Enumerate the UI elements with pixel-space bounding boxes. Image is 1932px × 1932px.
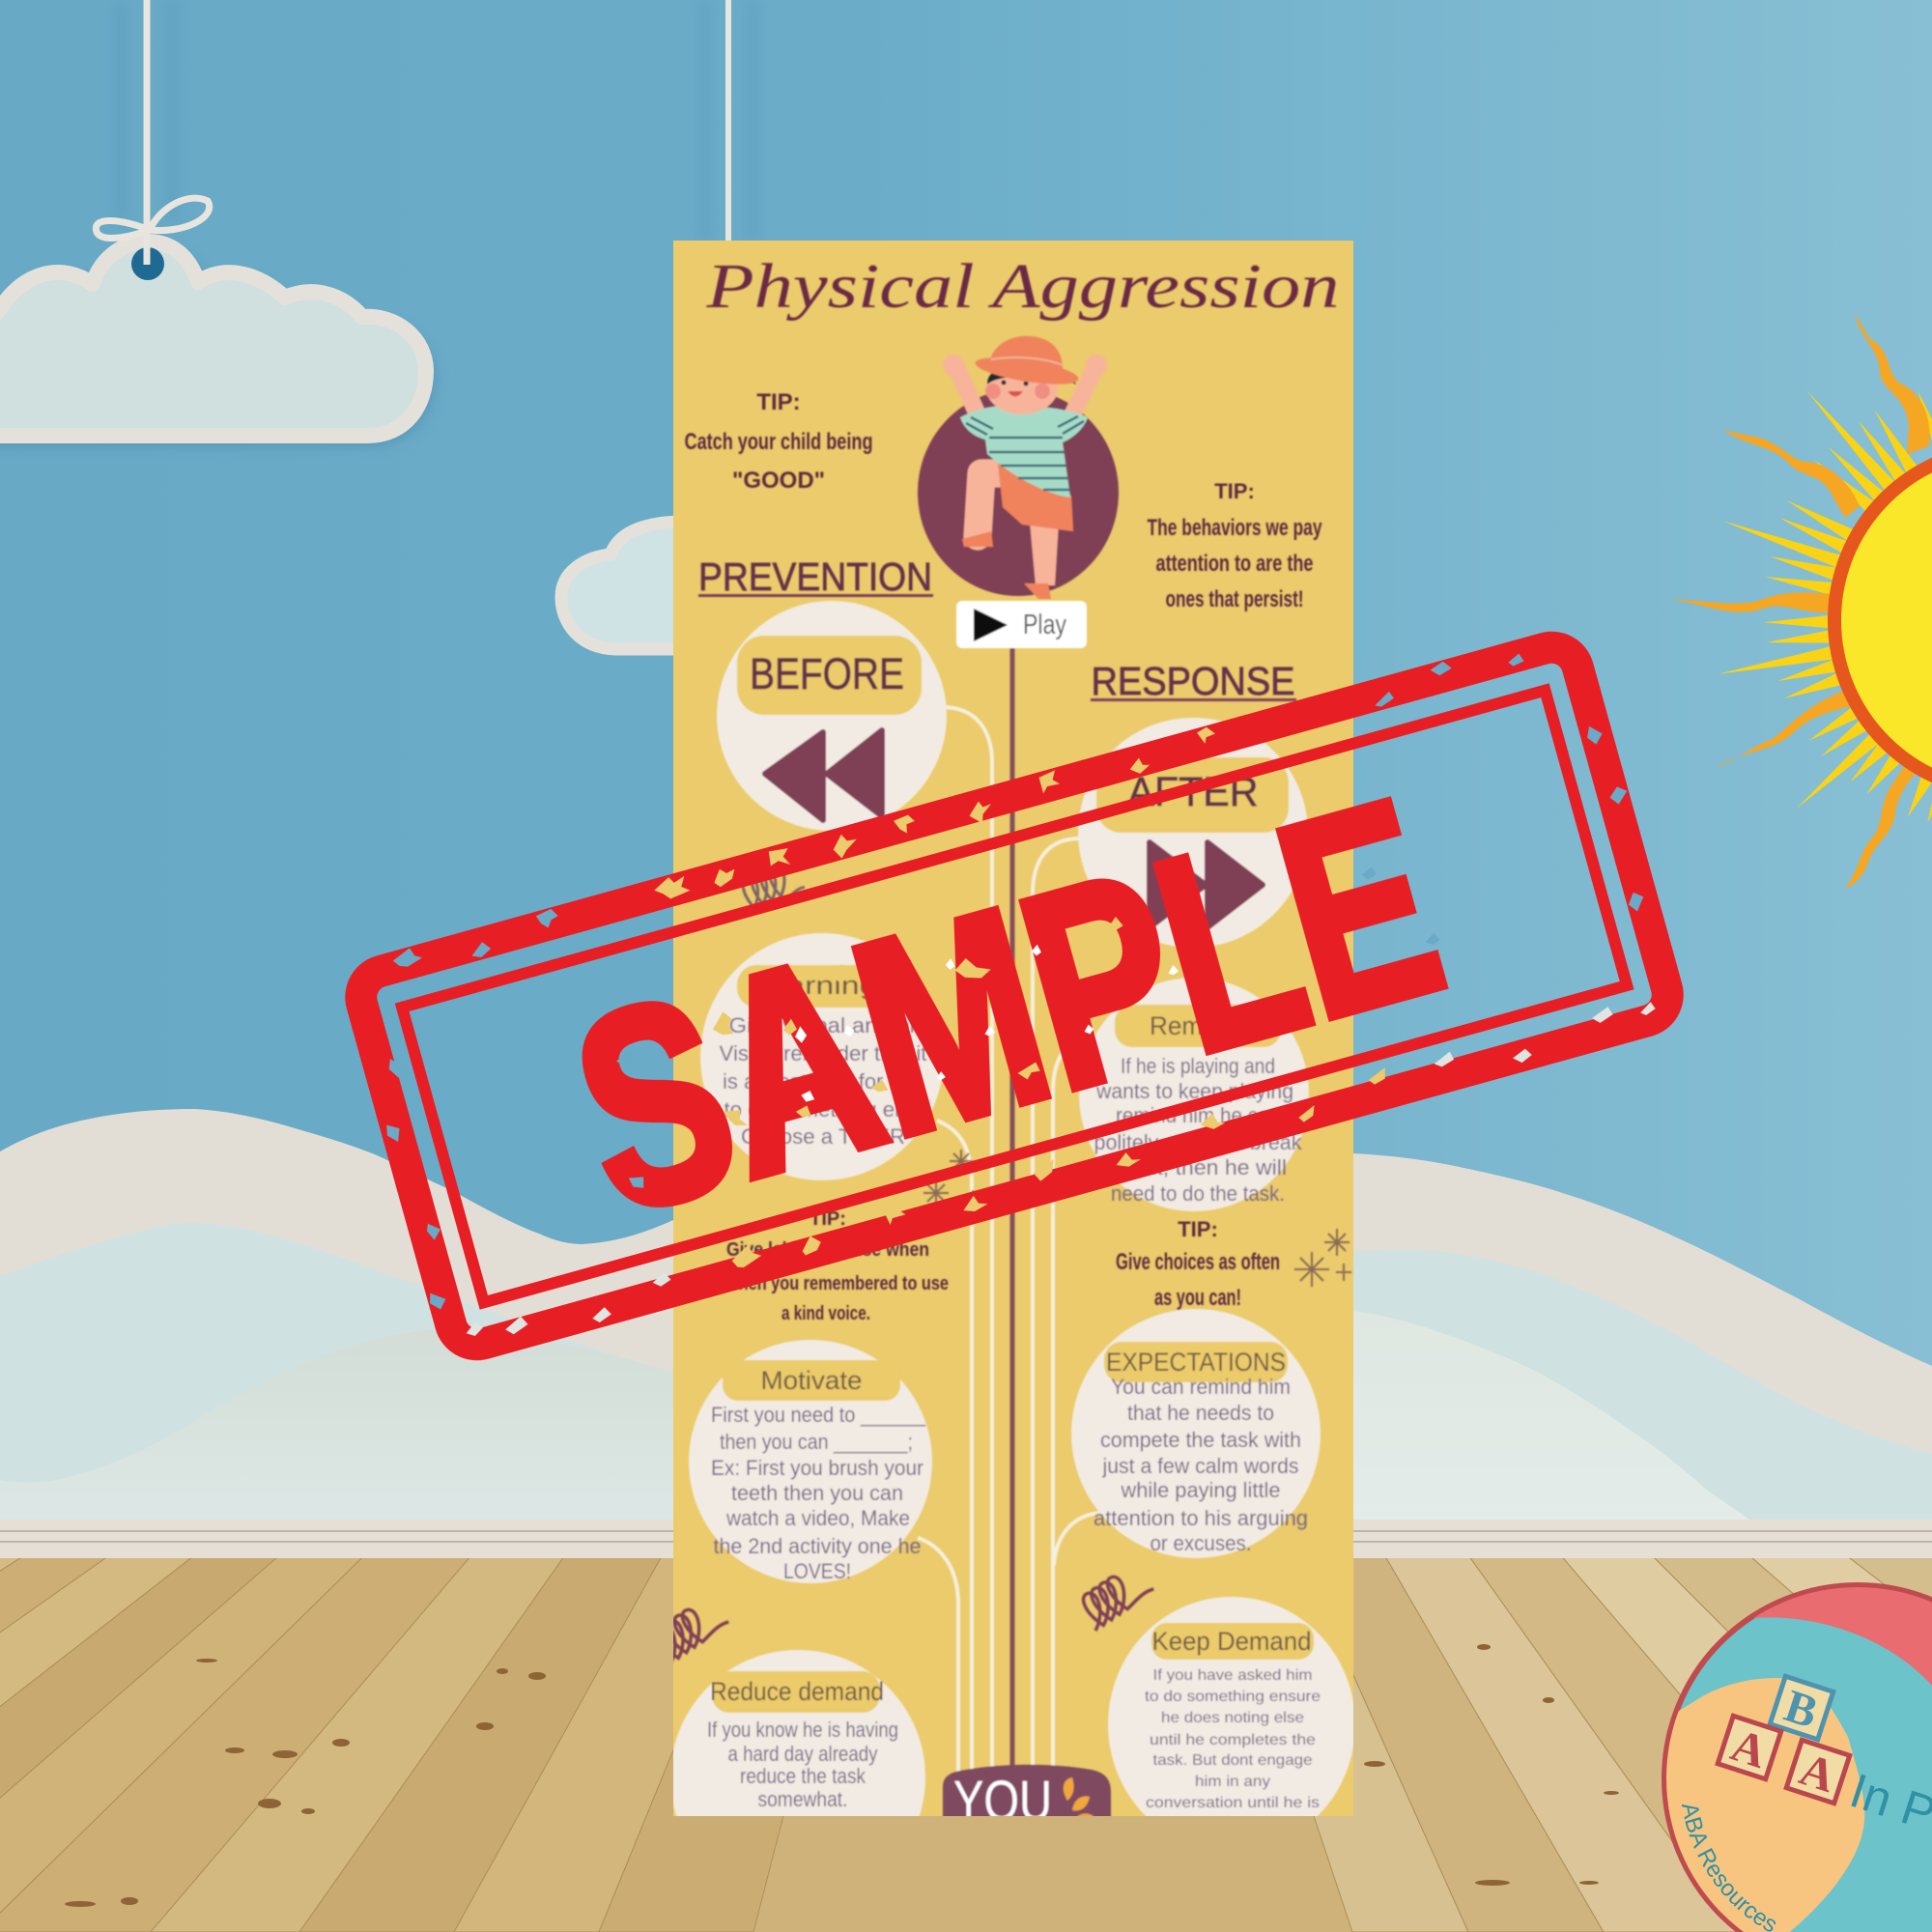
sun disc <box>1834 448 1932 792</box>
floor knots <box>65 1644 1619 1907</box>
floor planks <box>0 1558 1932 1932</box>
stamp outer border <box>355 641 1674 1350</box>
heading: prevention: PREVENTION <box>698 554 932 599</box>
logo badge: ABA in Play <box>1662 1582 1932 1932</box>
logo red crescent <box>1754 1587 1932 1686</box>
warning circle <box>700 933 944 1180</box>
stamp word: SAMPLE <box>547 741 1467 1273</box>
remind body text: If he is playing and <box>1121 1054 1275 1078</box>
tip: give praise: TIP: <box>810 1208 846 1230</box>
arms <box>957 369 1094 421</box>
tip: behaviors we pay attention to: TIP: <box>1214 479 1255 503</box>
play button <box>956 601 1087 648</box>
wood floor <box>0 1558 1932 1932</box>
illustration: child in purple circle <box>918 336 1119 599</box>
second hanging string <box>725 0 731 243</box>
keep demand body text: If you have asked him <box>1153 1667 1312 1684</box>
shirt stripes <box>966 416 1084 490</box>
motivate body text: then you can _______; <box>720 1430 913 1454</box>
tip: catch your child: Catch your child being <box>684 429 873 455</box>
remind label pill <box>1115 1005 1281 1047</box>
sparkles right <box>1294 1229 1351 1287</box>
after label pill <box>1096 757 1289 833</box>
tip: give choices: TIP: <box>1178 1217 1218 1241</box>
sun wavy rays <box>1671 314 1930 889</box>
expectations body text: attention to his arguing <box>1094 1506 1308 1530</box>
icon: string bow <box>96 198 210 238</box>
cloud: small cloud <box>561 522 686 649</box>
remind circle <box>1079 978 1309 1211</box>
before label pill <box>737 636 922 715</box>
icon: rewind <box>765 730 882 820</box>
raised leg <box>978 473 1005 536</box>
motivate body text: Ex: First you brush your <box>711 1456 923 1480</box>
title: Physical Aggression <box>705 251 1339 322</box>
sun straight rays <box>1717 386 1932 825</box>
reduce demand label pill <box>712 1671 880 1713</box>
block B: B <box>1778 1680 1824 1739</box>
sparkles left <box>923 1150 980 1206</box>
reduce demand body text <box>707 1718 898 1811</box>
motivate label pill <box>723 1360 900 1401</box>
motivate body text <box>711 1403 926 1583</box>
after circle: AFTER <box>1128 769 1258 815</box>
tip: behaviors we pay attention to: The behaviors we pay <box>1148 515 1322 541</box>
keep demand body text: until he completes the <box>1150 1732 1316 1748</box>
motivate body text: teeth then you can <box>731 1481 903 1505</box>
keep demand circle <box>1108 1597 1355 1852</box>
keep demand body text: to do something ensure <box>1145 1689 1321 1705</box>
reduce demand body text: somewhat. <box>757 1787 848 1811</box>
hair <box>986 373 1076 384</box>
warning body text: Give verbal and or <box>728 1013 918 1037</box>
tip: behaviors we pay attention to: ones that persist! <box>1165 586 1304 612</box>
you badge: YOU <box>953 1770 1052 1833</box>
reduce demand body text: a hard day already <box>728 1742 877 1766</box>
tip: behaviors we pay attention to <box>1148 479 1322 612</box>
standing leg <box>1030 522 1059 585</box>
tip: give praise <box>725 1208 949 1324</box>
motivate circle: Motivate <box>761 1366 862 1395</box>
doodle: loops right <box>1075 1561 1154 1631</box>
tip: give choices <box>1116 1217 1280 1311</box>
expectations body text: or excuses. <box>1150 1531 1252 1555</box>
background: paper hills <box>0 1109 1932 1526</box>
warning circle: Warning <box>757 971 877 1000</box>
cloud: large hanging cloud <box>0 0 435 446</box>
expectations body text: that he needs to <box>1127 1401 1274 1425</box>
reduce demand body text: If you know he is having <box>707 1718 898 1742</box>
keep demand label pill <box>1151 1623 1314 1660</box>
motivate body text: watch a video, Make <box>725 1506 910 1530</box>
panel: infographic poster <box>650 241 1355 1905</box>
heading: response: RESPONSE <box>1092 659 1294 703</box>
baseboard <box>0 1520 1932 1558</box>
hat <box>974 336 1080 389</box>
remind body text: finish it, then he will <box>1094 1155 1287 1179</box>
warning body text: is almost time for him <box>723 1069 923 1094</box>
block A right: A <box>1794 1744 1842 1803</box>
block A left: A <box>1725 1719 1774 1778</box>
icon: orange petals <box>1064 1777 1094 1823</box>
central timeline line <box>1010 648 1014 1775</box>
keep demand circle: Keep Demand <box>1151 1627 1312 1656</box>
keep demand body text <box>1145 1667 1321 1811</box>
reduce demand circle: Reduce demand <box>710 1677 884 1706</box>
play button: Play <box>1023 610 1066 640</box>
tip: behaviors we pay attention to: attention to are the <box>1155 551 1314 577</box>
tip: catch your child: "GOOD" <box>732 468 825 494</box>
keep demand body text: he does noting else <box>1161 1710 1304 1726</box>
before circle: BEFORE <box>750 649 904 698</box>
warning body text: Visual reminder that it <box>719 1041 927 1065</box>
motivate body text: the 2nd activity one he <box>713 1534 922 1558</box>
remind body text: politely ask for a break <box>1094 1130 1302 1154</box>
motivate circle <box>689 1340 932 1583</box>
icon: fast forward <box>1150 842 1263 927</box>
stamp inner border <box>402 691 1627 1302</box>
expectations body text <box>1094 1375 1308 1555</box>
warning body text: to do something else <box>724 1097 922 1122</box>
motivate body text: First you need to ______ <box>711 1403 926 1427</box>
stamp distress flecks <box>337 623 1690 1365</box>
reduce demand circle <box>670 1650 925 1905</box>
doodle: loops top left <box>735 858 806 916</box>
motivate body text: LOVES! <box>783 1559 851 1583</box>
tip: give choices: as you can! <box>1154 1285 1241 1311</box>
tip: catch your child <box>684 389 873 494</box>
reduce demand body text: reduce the task <box>740 1764 867 1788</box>
shorts <box>997 456 1073 531</box>
expectations circle: EXPECTATIONS <box>1106 1348 1286 1377</box>
tip: give praise: when you remembered to use <box>725 1273 949 1294</box>
remind body text: remind him he can <box>1116 1103 1280 1127</box>
shirt <box>960 406 1088 497</box>
connector lines <box>918 707 1101 1775</box>
remind body text: need to do the task. <box>1111 1181 1285 1206</box>
logo blocks <box>1718 1676 1850 1805</box>
doodle: loops left <box>650 1594 729 1663</box>
remind body text: wants to keep playing <box>1095 1079 1293 1103</box>
expectations body text: while paying little <box>1121 1478 1281 1502</box>
warning label pill <box>737 965 908 1008</box>
keep demand body text: him in any <box>1195 1774 1270 1790</box>
background: blue wall <box>0 0 1932 1546</box>
expectations circle <box>1071 1309 1321 1558</box>
expectations body text: You can remind him <box>1111 1375 1291 1399</box>
face <box>985 377 1059 415</box>
string shadows <box>121 0 753 242</box>
you badge <box>943 1765 1111 1833</box>
icon: play triangle <box>974 609 1008 641</box>
tip: give praise: a kind voice. <box>781 1303 870 1324</box>
tip: give praise: Give labeled praise when <box>726 1239 929 1261</box>
hanging string <box>143 0 151 265</box>
expectations body text: compete the task with <box>1100 1428 1301 1452</box>
expectations body text: just a few calm words <box>1102 1454 1298 1478</box>
stamp: SAMPLE <box>337 623 1690 1365</box>
remind circle: Remind <box>1150 1011 1236 1040</box>
remind body text <box>1094 1054 1302 1206</box>
after circle <box>1078 718 1308 948</box>
warning body text: Choose a TIMER <box>741 1124 905 1149</box>
keep demand body text: conversation until he is <box>1146 1795 1320 1811</box>
icon: cloud eyelet <box>131 247 164 280</box>
expectations label pill <box>1104 1342 1288 1382</box>
logo orange wash <box>1666 1678 1864 1932</box>
keep demand body text: task. But dont engage <box>1153 1752 1313 1769</box>
before circle <box>717 601 947 831</box>
warning body text <box>719 1013 927 1149</box>
icon: sun <box>1671 314 1932 889</box>
tip: catch your child: TIP: <box>756 389 801 415</box>
tip: give choices: Give choices as often <box>1116 1249 1280 1275</box>
